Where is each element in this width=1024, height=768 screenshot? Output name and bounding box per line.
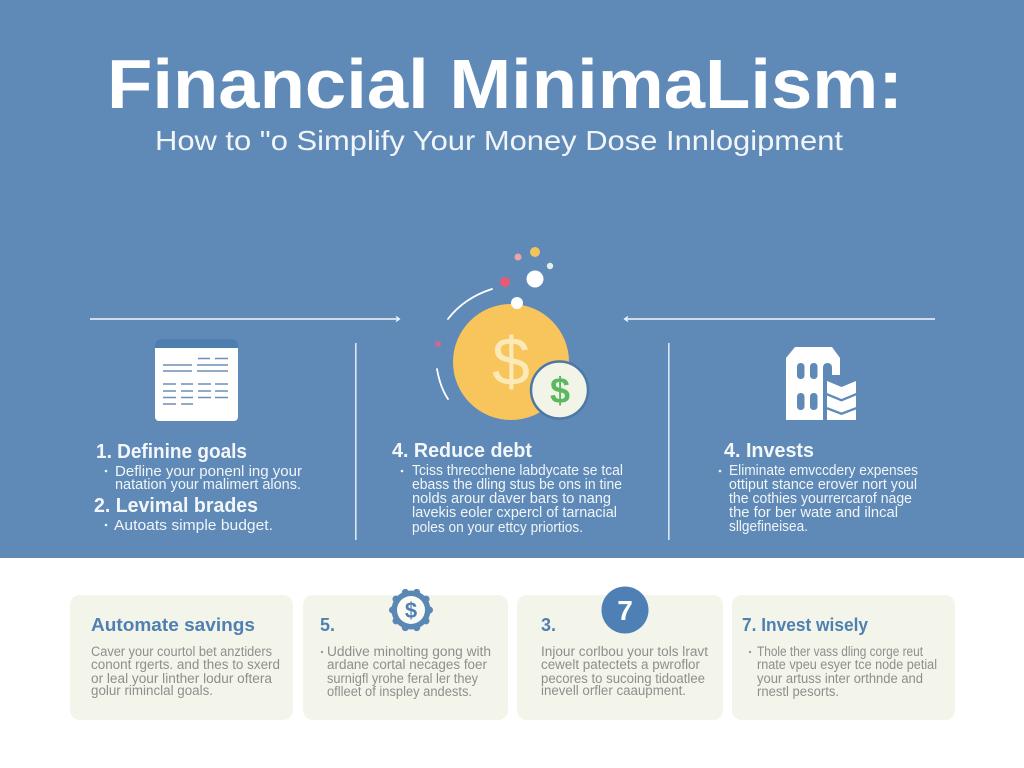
bullet text: invests: ottiput stance erover nort youl: [729, 477, 917, 493]
orbit arcs: [437, 289, 492, 399]
panel: card five: [303, 589, 508, 720]
icon: building with stacked layers: [786, 347, 856, 420]
bullet text: reduce debt: [401, 463, 623, 536]
card text: Thole ther vass dling corge reut: [757, 644, 923, 659]
arrow: left line pointing to centre: [90, 316, 400, 322]
bullet text: define: Defline your ponenl ing your: [115, 464, 302, 480]
panel: automate savings card: [70, 595, 293, 720]
card text: [749, 644, 937, 699]
card text: golur riminclal goals.: [91, 683, 213, 698]
card text: [541, 644, 708, 698]
gold coin: [453, 304, 569, 420]
card text: Injour corlbou your tols lravt: [541, 644, 708, 659]
arrow: right line pointing to centre: [624, 316, 935, 322]
card text: your artuss inter orthnde and: [757, 671, 923, 686]
card text: [91, 644, 280, 698]
bullet text: reduce debt: Tciss threcchene labdycate se tcal: [412, 463, 623, 479]
card number: 3.: [541, 614, 556, 635]
bullet text: invests: sllgefineisea.: [729, 519, 808, 535]
badge: number seven: [602, 586, 648, 634]
bullet text: reduce debt: ebass the dling stus be ons in tine: [412, 477, 622, 493]
gold coin: $: [492, 324, 530, 400]
bullet text: reduce debt: lavekis eoler cxpercl of tarnacial: [412, 505, 617, 521]
bullet text: budget: Autoats simple budget.: [114, 518, 273, 534]
panel: column two text: [392, 440, 623, 536]
card text: or leal your linther lodur oftera: [91, 671, 272, 686]
badge: number seven: 7: [617, 595, 633, 626]
icon: coins with orbiting dots: [435, 247, 588, 420]
card text: Uddive minolting gong with: [327, 644, 491, 659]
panel: card three: [517, 586, 723, 720]
bullet text: define: natation your malimert alons.: [115, 477, 301, 493]
title: Financial MinimaLism:: [107, 45, 903, 123]
card text: oflleet of inspley andests.: [327, 684, 472, 699]
bullet text: invests: Eliminate emvccdery expenses: [729, 463, 918, 479]
panel: column three text: [719, 440, 918, 535]
heading: levimal brades: 2. Levimal brades: [94, 495, 258, 517]
blue header background: [0, 0, 1024, 558]
subtitle: How to "o Simplify Your Money Dose Innlogipment: [155, 125, 843, 156]
decorative dots: [435, 247, 553, 347]
panel: column one text: [94, 441, 302, 534]
card text: conont rgerts. and thes to sxerd: [91, 657, 280, 672]
card text: cewelt patectets a pwroflor: [541, 657, 700, 672]
icon: gear with dollar: [389, 589, 433, 631]
heading: reduce debt: 4. Reduce debt: [392, 440, 532, 462]
bullet text: define: [105, 464, 302, 493]
card heading: 7. Invest wisely: [742, 614, 869, 635]
bullet text: reduce debt: poles on your ettcy priortios.: [412, 520, 583, 536]
bullet text: reduce debt: nolds arour daver bars to nang: [412, 491, 611, 507]
icon: spreadsheet: [155, 339, 238, 421]
small green dollar coin: $: [550, 370, 570, 411]
card text: Caver your courtol bet anztiders: [91, 644, 272, 659]
card text: ardane cortal necages foer: [327, 657, 487, 672]
card text: [321, 644, 491, 699]
icon: gear with dollar: $: [405, 598, 417, 623]
card number: 5.: [320, 614, 335, 635]
card text: inevell orfler caaupment.: [541, 683, 686, 698]
card text: rnestl pesorts.: [757, 684, 839, 699]
small green dollar coin: [531, 362, 588, 418]
panel: invest wisely card: [732, 595, 955, 720]
card text: pecores to sucoing tidoatlee: [541, 671, 705, 686]
bullet text: invests: [719, 463, 918, 535]
card heading: Automate savings: [91, 614, 255, 635]
bullet text: invests: the for ber wate and ilncal: [729, 505, 898, 521]
divider left: [355, 343, 357, 540]
heading: define goals: 1. Definine goals: [96, 441, 247, 463]
bullet text: invests: the cothies yourrercarof nage: [729, 491, 912, 507]
divider right: [668, 343, 670, 540]
card text: surnigfl yrohe feral ler they: [327, 671, 478, 686]
heading: invests: 4. Invests: [724, 440, 814, 462]
card text: rnate vpeu esyer tce node petial: [757, 657, 937, 672]
